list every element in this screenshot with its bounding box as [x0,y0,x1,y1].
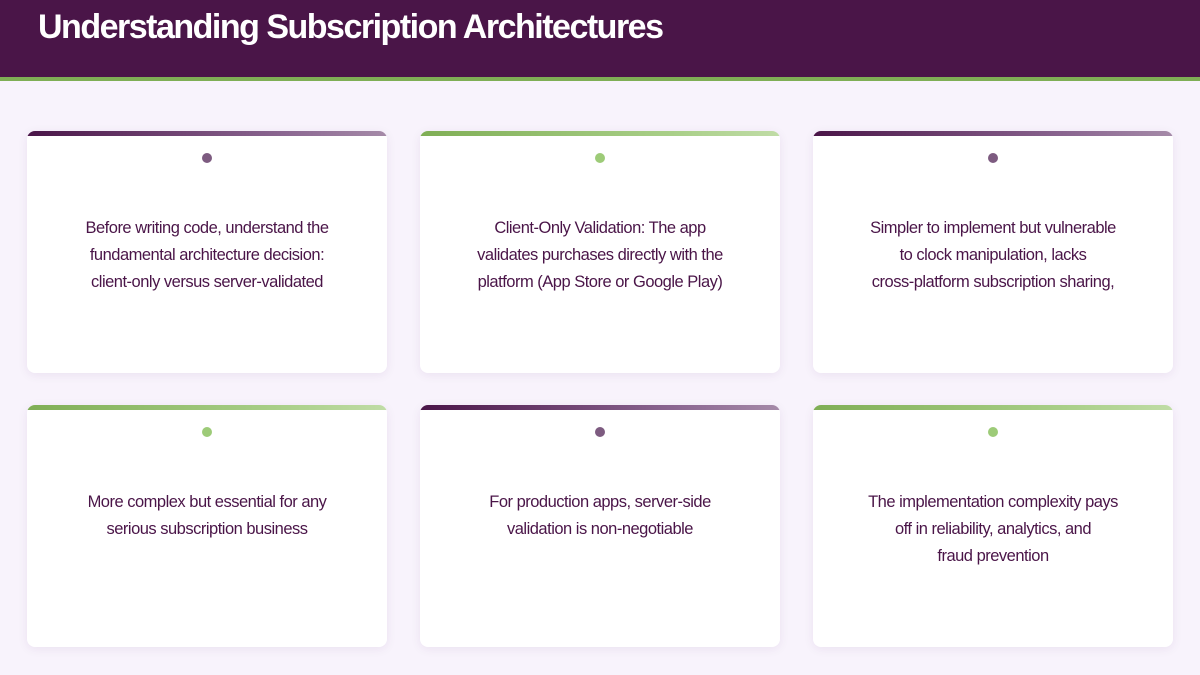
card 2 text [477,219,723,291]
card 4 text: More complex but essential for any [88,493,326,511]
card 5 text [489,493,711,538]
card 5 text: For production apps, server-side [489,493,711,511]
card 5 text: validation is non-negotiable [507,520,693,538]
card 6 text [868,493,1118,565]
card 3 text: Simpler to implement but vulnerable [870,219,1116,237]
card 1 [27,131,387,373]
title: Understanding Subscription Architectures [38,8,662,46]
card 3 text [870,219,1116,291]
card 2 [420,131,780,373]
card 1 text [86,219,328,291]
card 3 text: to clock manipulation, lacks [900,246,1086,264]
card 2 text: validates purchases directly with the [477,246,723,264]
card 5 [420,405,780,647]
card 6 text: The implementation complexity pays [868,493,1118,511]
header [0,0,1200,81]
card 1 text: client-only versus server-validated [91,273,323,291]
card 3 text: cross-platform subscription sharing, [872,273,1114,291]
card 1 text: Before writing code, understand the [86,219,328,237]
card 4 text: serious subscription business [106,520,308,538]
card 6 text: fraud prevention [937,547,1049,565]
card 6 [813,405,1173,647]
card 4 text [88,493,327,538]
card 2 text: Client-Only Validation: The app [494,219,706,237]
card 4 [27,405,387,647]
card 1 text: fundamental architecture decision: [90,246,324,264]
card 6 text: off in reliability, analytics, and [895,520,1091,538]
card 2 text: platform (App Store or Google Play) [478,273,722,291]
card 3 [813,131,1173,373]
